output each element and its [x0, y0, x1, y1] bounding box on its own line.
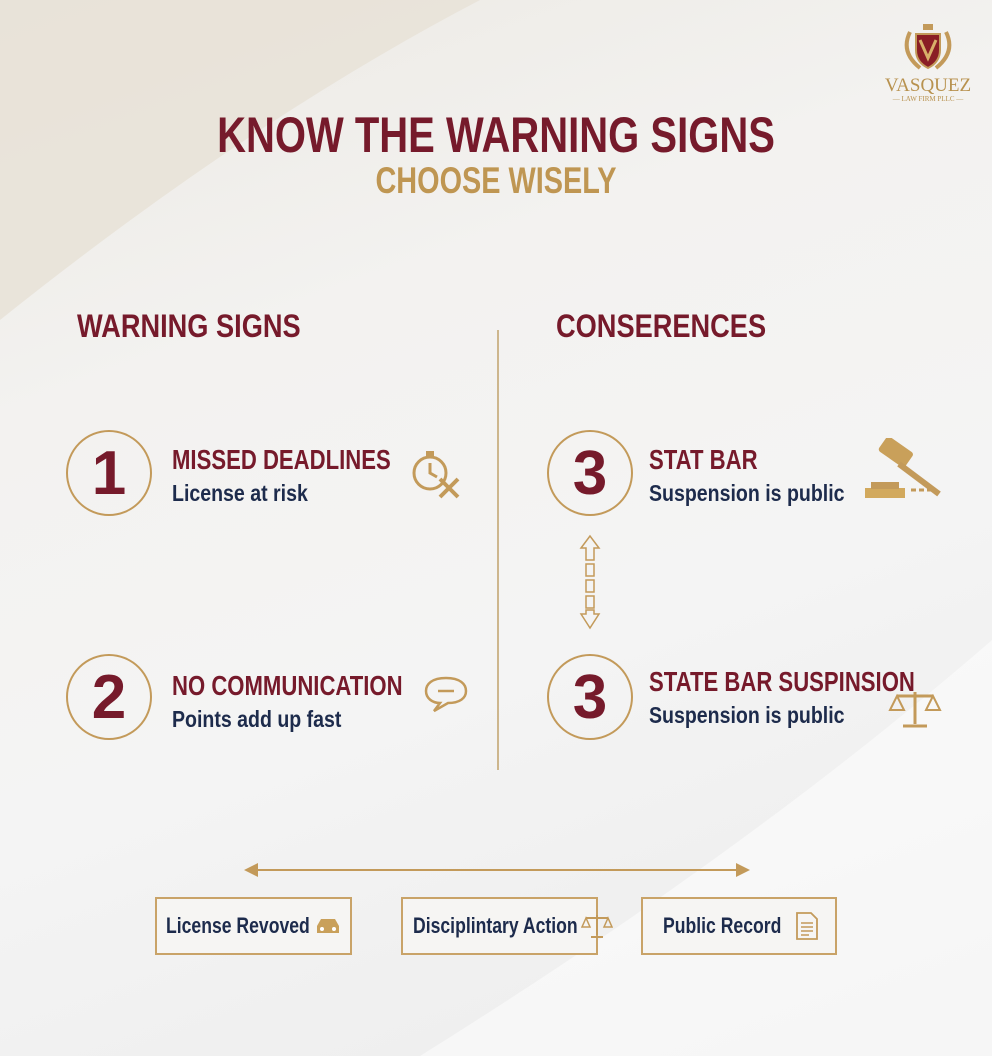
item 1: 1 — [92, 439, 126, 508]
item 4: state bar suspension — [547, 654, 942, 740]
item 3: stat bar: 3 — [573, 439, 607, 508]
item 2 — [66, 654, 468, 740]
box: disciplinary action — [401, 897, 598, 955]
icon: scales — [888, 692, 942, 728]
item 2: Points add up fast — [172, 706, 341, 732]
icon: clock x — [412, 451, 460, 498]
subtitle: CHOOSE WISELY — [375, 160, 617, 201]
box: license revoked: License Revoved — [166, 913, 310, 938]
item 1: License at risk — [172, 480, 308, 506]
item 3: stat bar: STAT BAR — [649, 444, 758, 475]
arrow: vertical — [580, 534, 600, 630]
box: disciplinary action: Disciplintary Action — [413, 913, 578, 938]
title: KNOW THE WARNING SIGNS — [217, 107, 775, 163]
item 2: NO COMMUNICATION — [172, 670, 403, 701]
logo — [885, 24, 971, 103]
box: public record: Public Record — [663, 913, 781, 938]
item 4: state bar suspension: STATE BAR SUSPINSION — [649, 666, 915, 697]
arrow: horizontal — [244, 863, 750, 877]
logo: VASQUEZ — [885, 75, 971, 96]
item 4: state bar suspension: 3 — [573, 663, 607, 732]
item 3: stat bar — [547, 430, 941, 516]
box: license revoked — [155, 897, 352, 955]
heading: consequences: CONSERENCES — [556, 308, 766, 344]
item 4: state bar suspension: Suspension is public — [649, 702, 845, 728]
item 2: 2 — [92, 663, 126, 732]
heading: warning signs: WARNING SIGNS — [77, 308, 301, 344]
item 1: MISSED DEADLINES — [172, 444, 391, 475]
box: public record — [641, 897, 837, 955]
item 3: stat bar: Suspension is public — [649, 480, 845, 506]
icon: chat — [424, 676, 468, 712]
icon: gavel — [865, 438, 941, 498]
logo: — LAW FIRM PLLC — — [893, 95, 963, 103]
item 1 — [66, 430, 460, 516]
